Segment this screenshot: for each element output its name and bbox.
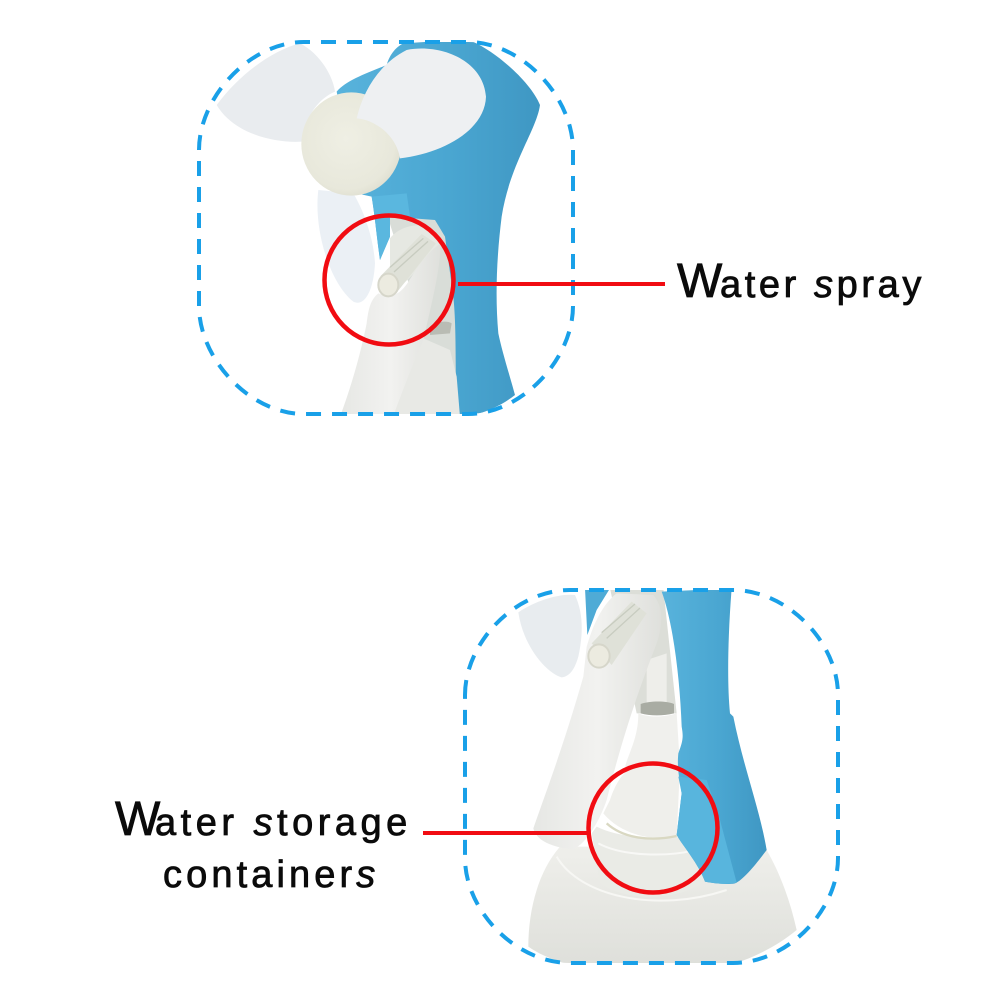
fan photo illustration, upper	[217, 39, 540, 417]
label: water storage containers: W	[115, 793, 165, 846]
label: water storage containers: ater	[155, 802, 254, 844]
panel: water storage detail	[115, 588, 838, 967]
label: water storage containers: containers	[163, 854, 379, 896]
label: water storage containers: storage	[254, 802, 412, 844]
dashed frame, lower	[465, 590, 838, 963]
red highlight circle: nozzle	[324, 216, 454, 344]
red highlight circle: container	[588, 764, 718, 892]
infographic canvas	[114, 40, 922, 965]
fan photo illustration, lower	[518, 588, 797, 967]
label: water storage containers	[115, 793, 412, 896]
panel: water spray detail	[199, 39, 925, 417]
leader line: water spray	[458, 282, 665, 286]
dashed frame, upper	[199, 42, 573, 414]
label: water spray: W	[677, 255, 726, 308]
label: water spray: ater	[720, 264, 814, 306]
leader line: water storage	[423, 831, 588, 835]
label: water spray: spray	[814, 264, 925, 306]
